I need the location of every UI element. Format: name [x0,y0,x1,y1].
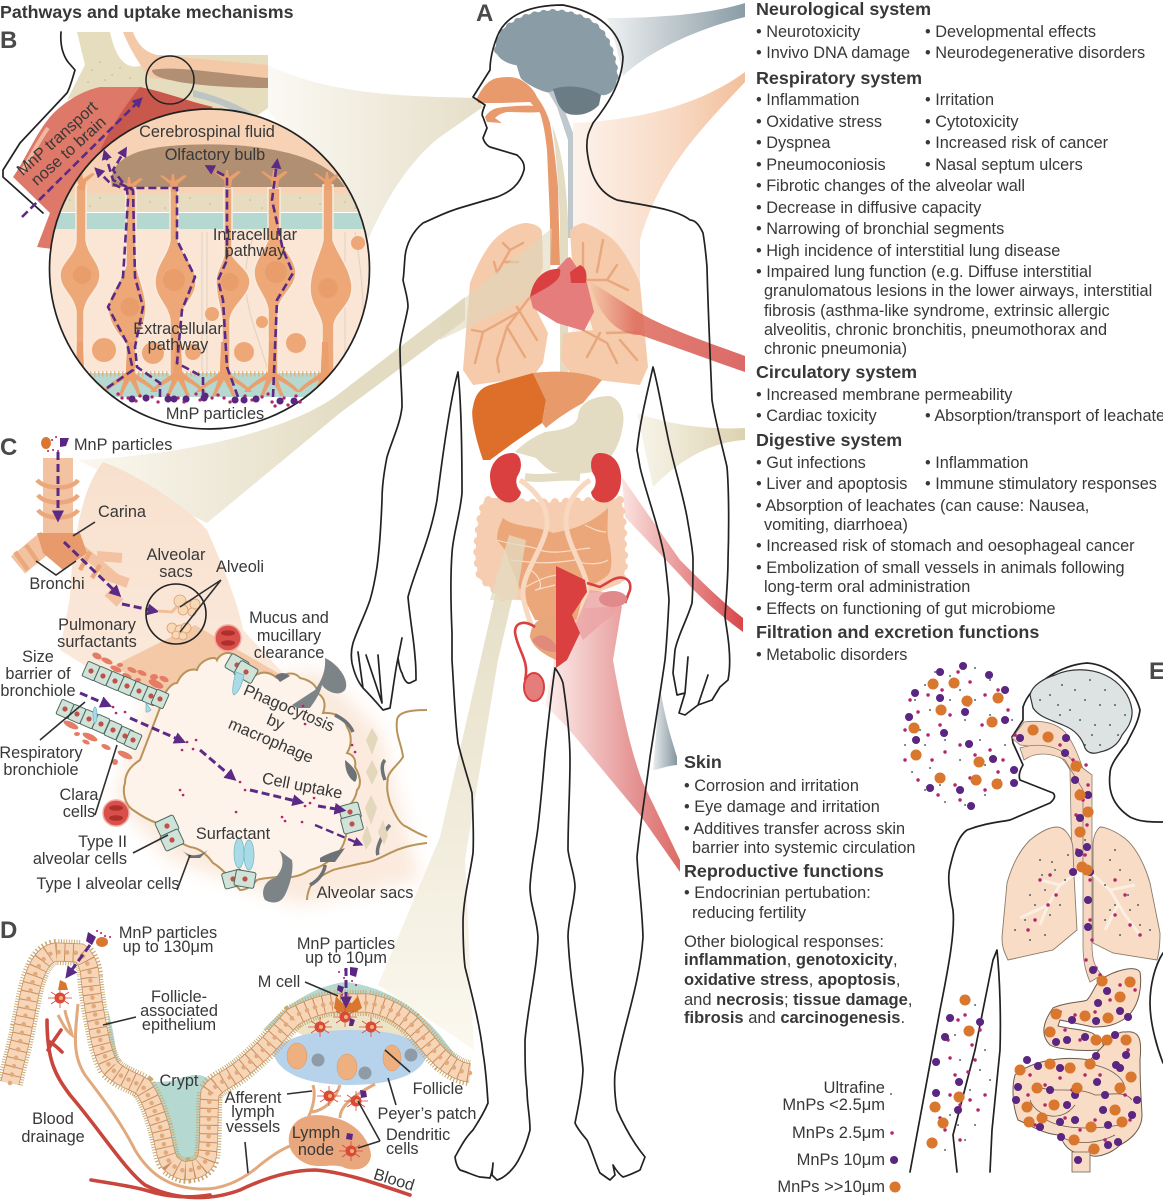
text: skin: • Corrosion and irritation [684,777,859,795]
panel B: nose to brain [0,27,380,437]
epithelium cells [10,952,470,1171]
neuron 1 [60,185,100,375]
label: follicle-associated epithelium: associated [140,1002,218,1020]
text: respiratory system: • Pneumoconiosis [756,156,886,174]
text: digestive system: long-term oral administration [764,578,970,596]
bracket: bronchi [36,561,76,575]
label: afferent: vessels [226,1118,280,1136]
brain scallops [498,13,614,85]
text: digestive system: Digestive system [756,430,902,450]
label: surfactant: Surfactant [196,825,271,843]
label: M cell: M cell [258,973,300,991]
upper bronchiole [82,651,170,709]
neuron 5 [254,188,296,375]
upper red cells [91,651,170,690]
leader lines: alveoli [180,580,221,632]
right lung [561,223,648,385]
leader line: carina [73,522,95,536]
label: follicle-associated epithelium: epithelium [142,1016,216,1034]
small intestine [497,508,611,620]
label: Peyer's patch: Peyer’s patch [378,1105,476,1123]
large intestine [477,499,624,600]
label: lymph node: Lymph [292,1124,340,1142]
small intestine folds [497,525,608,590]
label: MnP particles: MnP particles [166,405,264,423]
follicles [287,1043,401,1080]
darker peach [115,625,290,700]
heart atrium left [530,269,560,297]
text: digestive system: • Liver and apoptosis [756,475,907,493]
stomach E [1044,969,1141,1051]
text: other biological responses: oxidative stress, apoptosis, [684,971,900,989]
upper cuboid cells [82,661,169,709]
neuron 6 [310,185,352,375]
label: phagocytosis: by [264,711,288,734]
text: neurological system: • Neurodegenerative disorders [925,44,1145,62]
olfactory bulb [111,144,345,187]
text: circulatory system: Circulatory system [756,362,917,382]
cone: skin [653,687,677,770]
text: respiratory system: • Increased risk of cancer [925,134,1109,152]
label: MnP up to 130: up to 130μm [123,938,213,956]
text: respiratory system: • Cytotoxicity [925,113,1019,131]
text: respiratory system: granulomatous lesions in the lower airways, interstitial [764,282,1152,300]
legend: MnPs 10μm [797,1151,885,1169]
label: respiratory bronchiole: Respiratory [0,744,83,762]
label: phagocytosis: macrophage [226,715,316,767]
>>10 micron particles [914,683,1131,1149]
label: size barrier: barrier of [5,665,71,683]
label: alveolar sacs: Alveolar sacs [317,884,413,902]
cone: intestine to panel D [378,535,526,1050]
panel C: lung uptake [0,434,427,905]
arm outline E [953,950,1000,1172]
kidney left [490,453,521,503]
text: digestive system: • Gut infections [756,454,866,472]
label: type II: alveolar cells [33,850,127,868]
body outline [351,5,730,1180]
text: respiratory system: • Oxidative stress [756,113,882,131]
Peyer's patch [273,1030,427,1085]
label: phagocytosis: Phagocytosis [241,681,337,736]
label: transport: nose to brain [28,113,110,189]
label: MnP up to 10: up to 10μm [305,949,387,967]
intestine folds [1030,1065,1132,1142]
microvilli [90,372,320,376]
leader lines [103,982,410,1173]
left bronchus [18,540,48,565]
text: circulatory system [756,362,1163,425]
red blood cell 1 [215,625,241,651]
forehead tissue [123,32,268,88]
grey curved cells [310,715,390,885]
text: respiratory system: • High incidence of interstitial lung disease [756,242,1060,260]
text: respiratory system: chronic pneumonia) [764,340,907,358]
label: crypt: Crypt [160,1072,199,1090]
mucus layer [89,373,320,397]
label: afferent: Afferent [225,1089,281,1107]
dendritic cells [48,988,383,1161]
cone: lung to panel C [77,297,465,523]
duodenum [525,477,580,478]
text: digestive system: • Inflammation [925,454,1028,472]
label: alveoli: Alveoli [216,558,264,576]
torso outline E [1150,953,1163,1063]
label: MnP up to 130: MnP particles [119,924,217,942]
label: olfactory bulb: Olfactory bulb [165,146,265,164]
testis [524,673,544,701]
macrophage bottom [263,850,293,902]
title: Pathways and uptake mechanisms [0,2,294,22]
label: afferent: lymph [231,1103,275,1121]
2.5 micron particles [905,672,1140,1150]
text: neurological system: • Invivo DNA damage [756,44,910,62]
lower cuboid cells [56,699,142,750]
grey strip [193,90,255,115]
label: cerebrospinal fluid: Cerebrospinal fluid [139,123,275,141]
label: size barrier: Size [22,648,54,666]
vas deferens [515,623,535,680]
prostate accent [532,635,556,652]
particles in sac [113,706,355,822]
particles right [337,967,358,1026]
fallopian tube [587,578,630,603]
grey cells in patch [312,1048,418,1080]
text: respiratory system: • Irritation [925,91,994,109]
panel A: human body [351,5,745,1180]
cone: reproductive organs to reproductive functions [545,606,680,872]
rectum [1072,1152,1090,1172]
label: lymph node: node [298,1141,334,1159]
teal layer [40,213,380,229]
neuron roots [76,342,330,396]
label: blood drainage: drainage [21,1128,85,1146]
panel E: deposition diagram [777,658,1163,1196]
dashed paths in circle [97,150,293,397]
airway [477,77,560,265]
arrow: onward [315,825,360,844]
large particles band [132,396,294,401]
brain [498,13,614,93]
legend: Ultrafine [824,1079,885,1097]
label: clara cells: cells [63,803,95,821]
label: type I: Type I alveolar cells [37,875,179,893]
text: filtration and excretion [756,622,1039,664]
M cell [334,996,362,1012]
neuron 3 [155,188,196,375]
text: respiratory system [756,68,1152,358]
spinal cord [547,90,573,238]
dome mucus [263,982,463,1065]
beige band over left lung [440,228,552,340]
dark nasal area [100,87,213,150]
arrow: into sac [130,718,182,741]
text: respiratory system: • Fibrotic changes of the alveolar wall [756,177,1025,195]
text: skin: barrier into systemic circulation [692,839,916,857]
text: neurological system [756,0,1145,62]
lung airways E [1020,872,1140,935]
arrow: to alveoli [122,604,155,611]
text: neurological system: • Developmental effects [925,23,1096,41]
lower red cells [62,719,134,765]
text: other biological responses: inflammation, genotoxicity, [684,951,898,969]
body outline E [910,663,1163,1172]
second alveolar sac [307,710,427,900]
label: alveolar sacs: Alveolar [147,546,205,564]
label: MnP up to 10: MnP particles [297,935,395,953]
glow around alveolar sacs [115,670,420,905]
arrow: bronchus [64,542,118,594]
text: digestive system [756,430,1157,618]
label: bronchi: Bronchi [29,575,85,593]
text: other biological responses: fibrosis and carcinogenesis. [684,1009,905,1027]
text: reproductive functions: Reproductive functions [684,861,884,881]
text: respiratory system: • Dyspnea [756,134,831,152]
cuboid cells [155,653,364,889]
label: MnP particles: MnP particles [74,436,172,454]
crypt mucus [0,1010,210,1162]
bone stipple [88,62,130,82]
stomach [515,396,624,474]
particle icons [41,437,69,451]
left ureter [520,480,547,625]
text: skin: Skin [684,752,722,772]
arrow: trachea [56,452,60,518]
blood vessel [47,1020,410,1198]
text: circulatory system: • Increased membrane permeability [756,386,1013,404]
text: respiratory system: alveolitis, chronic bronchitis, pneumothorax and [764,321,1107,339]
legend [777,1079,895,1196]
heart atrium right [570,265,586,283]
red blood cell 2 [103,800,129,826]
cerebellum [553,87,601,115]
label: pulmonary surfactants: surfactants [57,633,137,651]
right bronchus [70,540,128,603]
label: follicle-associated epithelium: Follicle- [151,988,207,1006]
panel C letter: C [0,434,17,461]
arrow: M cell [344,968,348,1004]
bronchial tree [472,240,640,372]
label: dendritic cells: Dendritic [386,1126,450,1144]
neuron 4 [216,188,250,375]
oral cavity [485,106,540,123]
text: digestive system: vomiting, diarrhoea) [764,516,908,534]
text: neurological system: • Neurotoxicity [756,23,861,41]
arrow: particles left [68,945,90,975]
ovary [599,591,627,607]
cone: nose to panel B [268,65,483,240]
macrophage top [292,658,346,708]
text: respiratory system: • Inflammation [756,91,859,109]
text: other biological responses [684,933,912,1027]
legend: MnPs <2.5μm [782,1096,885,1114]
lymph vessel [58,1004,375,1189]
arrow: nose to brain [22,100,140,217]
text: reproductive functions: • Endocrinian pertubation: [684,884,871,902]
label: pulmonary surfactants: Pulmonary [58,616,136,634]
nasal cavity [13,87,213,250]
label: follicle: Follicle [413,1080,463,1098]
oesophagus [552,125,568,372]
supporting cell borders [202,232,363,370]
large intestine bumps [477,500,624,597]
trachea [43,458,73,535]
nasal bone [67,32,268,115]
free cells [92,236,365,364]
cone: kidneys to filtration list [622,477,743,632]
epithelium nuclei [10,952,470,1171]
legend: MnPs >>10μm [777,1178,885,1196]
label: clara cells: Clara [60,786,98,804]
text: respiratory system: • Impaired lung function (e.g. Diffuse interstitial [756,263,1092,281]
white base [40,397,380,437]
text: other biological responses: Other biological responses: [684,933,884,951]
left lung E [1002,827,1077,960]
text: filtration and excretion: • Metabolic disorders [756,646,907,664]
alveoli inset [146,584,206,644]
liver dark lobe [472,373,546,460]
arrow: second stage [200,750,233,778]
particle band [118,394,300,406]
heart [530,257,594,331]
cone: lungs to respiratory list [572,72,745,380]
label: size barrier: bronchiole [0,682,76,700]
text: digestive system: • Immune stimulatory responses [925,475,1157,493]
right ureter [566,480,590,625]
small circle [146,56,194,104]
text: respiratory system: Respiratory system [756,68,922,88]
bone layer stipple [70,198,355,208]
carina [37,533,87,570]
salmon rim of nose [22,128,48,172]
bladder and prostate [530,615,556,660]
nasal cavity [1012,721,1085,870]
bone layer [61,193,358,212]
label: dendritic cells: cells [386,1140,419,1158]
neuron dendrites [68,170,341,195]
label: blood: Blood [371,1165,417,1195]
particle by dendritic cell [360,1090,367,1098]
text: reproductive functions [684,861,884,922]
text: digestive system: • Effects on functioning of gut microbiome [756,600,1056,618]
cone: stomach to digestive list [637,413,745,487]
alveolar sac [124,653,360,890]
cerebrospinal fluid layer [70,110,350,193]
label: type II: Type II [78,833,127,851]
label: phagocytosis [226,681,337,770]
text: reproductive functions: reducing fertility [692,904,807,922]
10 micron particles [909,666,1137,1160]
oral cavity and oesophagus [1020,745,1102,982]
alveolar cluster [158,595,200,640]
panel A letter: A [476,0,493,27]
leader lines [40,702,190,890]
cone: heart to circulatory list [588,280,745,372]
lung background [60,462,300,700]
epithelium base [10,952,470,1171]
text: circulatory system: • Cardiac toxicity [756,407,877,425]
text: skin: • Eye damage and irritation [684,798,880,816]
label: blood drainage: Blood [32,1110,74,1128]
surfactant drops [93,672,254,870]
left lung [463,223,548,385]
ovary region [575,590,625,640]
cell layer [40,229,380,372]
beige cone overlay on intestine [490,535,526,600]
lower bronchiole [56,699,142,765]
particle in lymph node [346,1133,353,1140]
label: extracellular pathway: pathway [148,336,209,354]
tracheal rings [15,480,100,578]
arrow: across bronchiole [80,693,108,705]
nose outline [3,32,75,213]
label: respiratory bronchiole: bronchiole [3,761,79,779]
label: intracellular pathway: pathway [225,242,286,260]
text: skin: • Additives transfer across skin [684,820,905,838]
label: intracellular pathway: Intracellular [213,226,297,244]
type I cells [182,673,357,862]
label: mucus: mucillary [257,627,322,645]
neuron 2 [108,190,146,375]
label: cell uptake: Cell uptake [260,769,344,803]
text: digestive system: • Absorption of leachates (can cause: Nausea, [756,497,1089,515]
kidney right [591,453,621,503]
intestines E [1013,1032,1142,1156]
text: skin [684,752,916,857]
label: transport: MnP transport [13,97,102,179]
big magnified circle [40,105,380,437]
legend: MnPs 2.5μm [792,1124,885,1142]
text: digestive system: • Increased risk of stomach and oesophageal cancer [756,537,1135,555]
interstitial cells [362,728,388,850]
liver light lobe [533,372,602,428]
text: filtration and excretion: Filtration and excretion functions [756,622,1039,642]
text: circulatory system: • Absorption/transport of leachate [925,407,1163,425]
arrow: third stage [250,790,300,802]
text: respiratory system: • Decrease in diffusive capacity [756,199,982,217]
cone: brain to neurological list [607,3,745,76]
text: respiratory system: • Nasal septum ulcers [925,156,1083,174]
label: carina: Carina [98,503,147,521]
dome beige [293,1007,410,1060]
text: respiratory system: • Narrowing of bronchial segments [756,220,1004,238]
text: other biological responses: and necrosis; tissue damage, [684,991,912,1009]
arrow: cell uptake [318,806,342,810]
olfactory band [152,69,268,88]
panel D letter: D [0,917,17,944]
uterus [556,566,587,668]
label: mucus: clearance [254,644,324,662]
right lung E [1093,827,1160,960]
text: digestive system: • Embolization of small vessels in animals following [756,559,1125,577]
text: respiratory system: fibrosis (asthma-like syndrome, extrinsic allergic [764,302,1110,320]
panel B letter: B [0,27,17,54]
particle left [58,931,110,990]
brain E [1030,670,1132,753]
label: mucus: Mucus and [249,609,329,627]
lymph node [289,1115,371,1169]
epithelium microvilli [10,952,470,1171]
label: extracellular pathway: Extracellular [133,320,223,338]
label: alveolar sacs: sacs [159,563,193,581]
panel D: intestinal uptake [0,917,476,1198]
ultrafine particles [905,668,1150,1150]
